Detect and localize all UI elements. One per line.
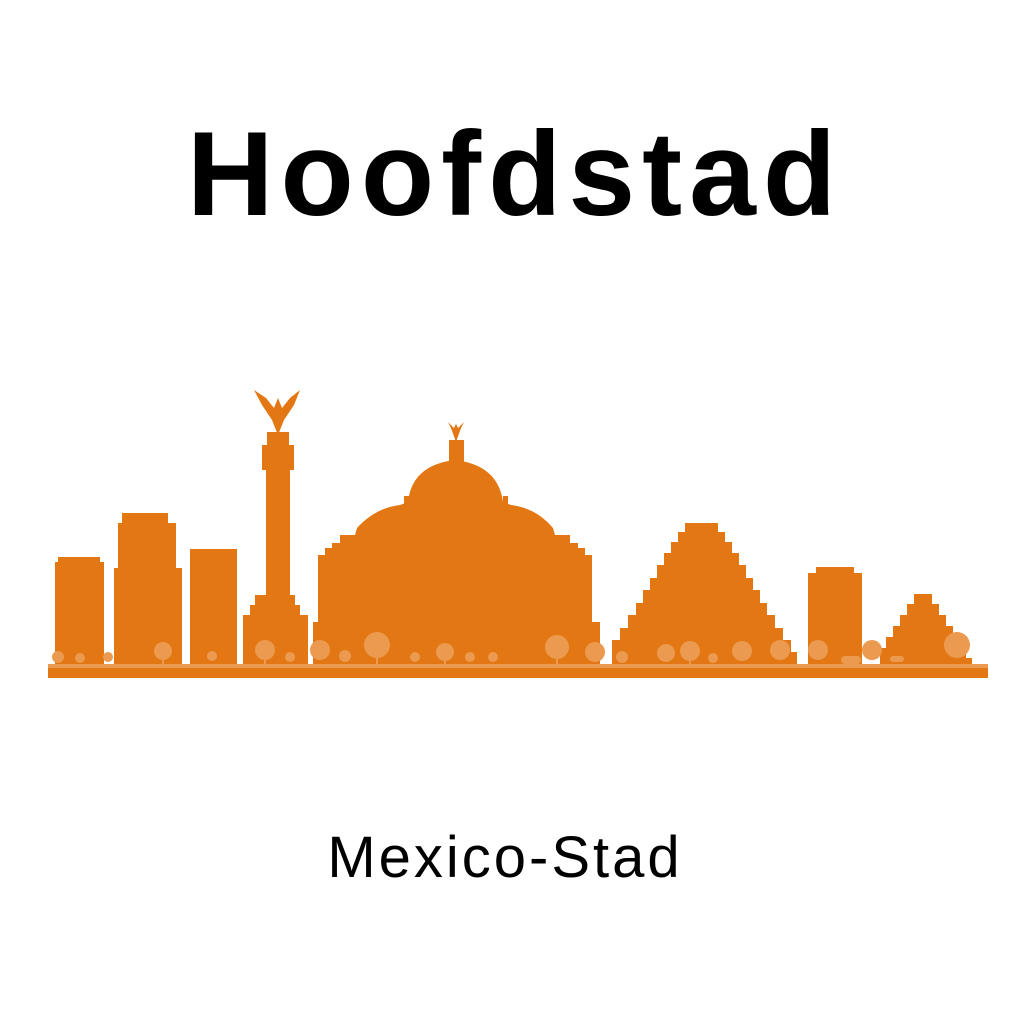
title: Hoofdstad: [187, 107, 843, 241]
pyramid 2: [880, 594, 972, 666]
angel of independence column: [243, 390, 308, 666]
palacio de bellas artes: [313, 422, 600, 666]
subtitle: Mexico-Stad: [327, 825, 683, 890]
trees and street details: [48, 632, 988, 668]
building 2: [114, 513, 182, 666]
building 4: [808, 567, 862, 666]
ground bar: [48, 666, 988, 678]
building 3: [190, 549, 237, 666]
pyramid 1: [612, 523, 797, 666]
building 1: [55, 557, 104, 666]
